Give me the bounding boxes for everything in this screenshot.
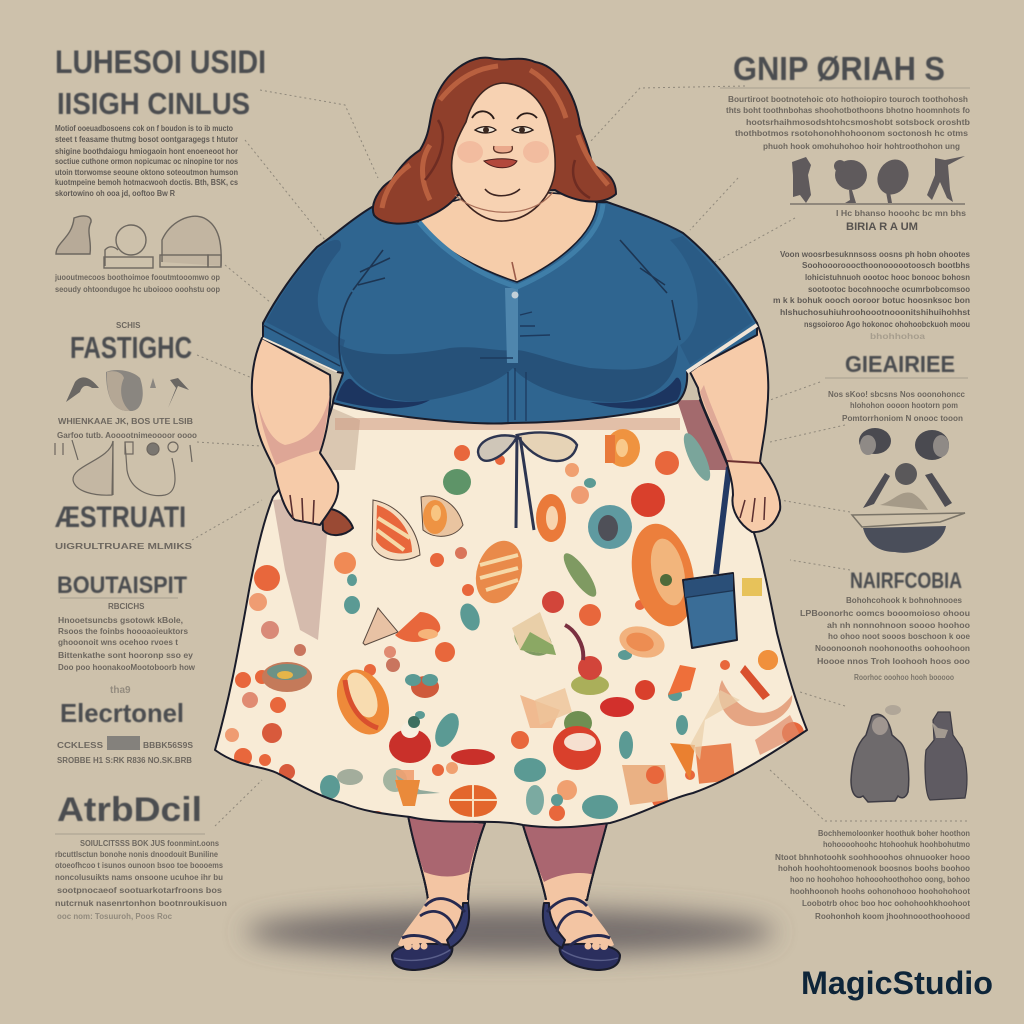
text block: bottom left: sootpnocaeof sootuarkotarfroons bos	[57, 886, 223, 895]
right arm	[690, 323, 780, 532]
text block: right upper: Voon woosrbesuknnsoss oosns ph hobn ohootes	[780, 250, 971, 259]
text block: bottom left: nutcrnuk nasenrtonhon bootnroukisuon	[55, 899, 227, 908]
panel: top right	[720, 50, 971, 341]
rule	[720, 87, 970, 89]
heading: lower mid left: ÆSTRUATI	[55, 501, 186, 534]
baseline	[790, 203, 965, 205]
rule	[60, 597, 178, 599]
text block: bottom right: Loobotrb ohoc boo hoc oohohoohkhoohoot	[802, 899, 970, 908]
rule	[55, 833, 205, 835]
text block: lower left: Hnooetsuncbs gsotowk kBole,	[58, 616, 183, 625]
heading: top left	[55, 44, 266, 121]
bag	[683, 467, 737, 648]
text block: right lower: Roorhoc ooohoo hooh booooo	[854, 673, 954, 682]
text block: right lower: LPBoonorhc oomcs booomoioso ohoou	[800, 609, 970, 618]
text block: lower left: Doo poo hoonakooMootoboorb how	[58, 663, 196, 672]
text block: top right: thothbotmos rsotohonohhohoonom soctonosh hc otms	[735, 129, 969, 138]
text block: mid left: Garfoo tutb. Aooootnimeoooor oooo	[57, 431, 197, 440]
text block: top left	[55, 124, 238, 198]
cuff edges	[263, 325, 340, 366]
eyes	[475, 127, 496, 133]
icon: hoodie front	[851, 705, 909, 802]
text block: mid right: Nos sKoo! sbcsns Nos ooonohoncc	[828, 390, 966, 399]
text block: bottom right: Ntoot bhnhotoohk soohhooohos ohnuooker hooo	[775, 853, 970, 862]
text block: lower left	[58, 602, 196, 696]
text block: bottom right: Roohonhoh koom jhoohnooothoohoood	[815, 912, 970, 921]
legs	[408, 815, 607, 905]
text block: top left: skortowino oh ooa jd, ooftoo Bw R	[55, 189, 175, 198]
icons: birds	[792, 154, 965, 203]
text block: bottom left: rbcuttlsctun bonohe nonis dnoodouit Buniline	[55, 850, 219, 859]
text block: bottom left: noncolusuikts nams onsoone ucuhoe ihr bu	[55, 873, 223, 882]
sandal: left	[392, 898, 469, 970]
skirt	[215, 400, 807, 829]
text block: top right: thts boht toothnbohas shoohotbothoons bhotno hoomnhots fo	[726, 106, 970, 115]
text block: top right	[726, 95, 970, 151]
nose	[494, 146, 512, 153]
connector lines	[192, 86, 970, 826]
text block: mid right: hlohohon oooon hootorn pom	[850, 401, 958, 410]
caption: birds: BIRIA R A UM	[846, 221, 918, 233]
text block: right lower: Bohohcohook k bohnohnooes	[846, 596, 963, 605]
text block: bottom left: SOIULCITSSS BOK JUS foonmint.oons	[80, 839, 220, 848]
text block: right upper: m k k bohuk oooch ooroor botuc hoosnksoc bon	[773, 296, 970, 305]
heading: top right: GNIP ØRIAH S	[733, 50, 945, 87]
text block: bottom right: hoo no hoohohoo hohooohoothohoo oong, bohoo	[790, 875, 970, 884]
text block: lower left: ghooonoit wns ocehoo rvoes t	[58, 638, 178, 647]
text block: right upper: lohicistuhnuoh oootoc hooc bonooc bohosn	[805, 273, 970, 282]
logo: MagicStudio: MagicStudio	[801, 965, 993, 1001]
text block: lower left: Rsoos the foinbs hoooaoieuktors	[58, 627, 189, 636]
rule	[825, 377, 968, 379]
data row: SROBBE H1 S:RK R836 NO.SK.BRB	[57, 756, 192, 765]
text block: top right: hootsrhaihmosodshtohcsmoshobt sotsbock oroshtb	[746, 118, 970, 127]
heading: top left: IISIGH CINLUS	[57, 86, 250, 121]
data row	[57, 736, 194, 765]
text block: top right: Bourtiroot bootnotehoic oto hothoiopiro touroch toothohosh	[728, 95, 968, 104]
text block: right upper: hlshuchosuhiuhroohoootnooonitshihuihohhst	[780, 308, 970, 317]
heading: right: NAIRFCOBIA	[850, 568, 962, 593]
heading: bottom left: AtrbDcil	[57, 791, 202, 829]
text block: top left: kuotmpeine bemoh hotmacwooh doctis. Bth, BSK, cs	[55, 178, 238, 187]
text block: top left: shigine boothdaiogu hmiogaoin hont enoeneoot hor	[55, 147, 238, 156]
heading: mid left: FASTIGHC	[70, 330, 192, 365]
text block: bottom right: hohoh hoohohtoomenook boosnos boohs boohoo	[778, 864, 970, 873]
text block: bottom right: Bochhemoloonker hoothuk boher hoothon	[818, 829, 970, 838]
label: SCHIS	[116, 321, 141, 330]
held object	[322, 509, 353, 535]
text block: bottom right	[775, 829, 970, 921]
fold shading	[273, 405, 360, 640]
text block: top right: phuoh hook omohuhohoo hoir hohtroothohon ung	[763, 142, 960, 151]
text block: bottom right: hoohhoonoh hoohs oohonohooo hoohohohoot	[790, 887, 970, 896]
text block: right upper	[773, 250, 971, 341]
text block: right lower: ah nh nonnohnoon soooo hoohoo	[827, 621, 970, 630]
icon: hoodie side	[925, 712, 967, 800]
caption: top left: seoudy ohtoondugoe hc uboiooo ooohstu oop	[55, 285, 220, 294]
face	[452, 83, 555, 221]
text block: right lower	[800, 596, 971, 682]
text block: bottom left	[55, 839, 227, 921]
skirt print	[225, 400, 804, 829]
text block: top left: steet t feasame thutmg bosot oontgaragegs t htutor	[55, 135, 238, 144]
caption: birds	[836, 209, 967, 233]
data row: BBBK56S9S	[143, 741, 194, 750]
icons: mid left	[66, 370, 189, 411]
text block: top left: Motiof ooeuadbosoens cok on f boudon is to ib mucto	[55, 124, 233, 133]
text block: top left: soctiue cuthone ormon nopicumac oc ninopine tor nos	[55, 157, 238, 166]
blouse	[263, 202, 757, 423]
heading: top left: LUHESOI USIDI	[55, 44, 266, 80]
panel: mid right	[800, 351, 971, 682]
panel: lower left	[55, 572, 227, 921]
sleeve shading	[266, 240, 345, 360]
text block: right upper: sootootoc bocohnooche ocumrbobcomsoo	[808, 285, 970, 294]
lower blouse shading	[340, 345, 678, 402]
panel: top left	[54, 44, 266, 294]
text block: right lower: Nooonoonoh noohonooths oohoohoon	[815, 644, 970, 653]
sandal: right	[543, 898, 620, 970]
subheading: UIGRULTRUARE MLMIKS	[55, 542, 193, 551]
heading: electronic: Elecrtonel	[60, 698, 184, 728]
caption: top left	[54, 273, 220, 294]
placket	[505, 288, 518, 363]
icons: top left	[56, 216, 221, 268]
caption: top left: juooutmecoos boothoimoe fooutmtooomwo op	[54, 273, 220, 282]
text block: lower left: tha9	[110, 685, 131, 696]
chin line	[485, 189, 520, 196]
hair	[373, 58, 616, 224]
text block: bottom left: otoeofhcoo t isunos ounoon bsoo toe boooems	[55, 861, 223, 870]
text block: bottom right: hohoooohoohc htohoohuk hoohbohutmo	[823, 840, 970, 849]
waist tie bow	[478, 432, 577, 530]
text block: lower left: Bittenkathe sont hooronp sso ey	[58, 651, 194, 660]
icons: pots	[55, 440, 192, 496]
text block: mid right: Pomtorrhoniom N onooc tooon	[842, 414, 963, 423]
heading: mid right: GIEAIRIEE	[845, 351, 955, 377]
text block: mid left: WHIENKAAE JK, BOS UTE LSIB	[58, 417, 193, 426]
text block: right upper: nsgsoioroo Ago hokonoc ohohoobckuoh moou	[804, 320, 970, 329]
left arm	[252, 338, 338, 525]
text block: lower left: RBCICHS	[108, 602, 145, 611]
icons: anatomy	[852, 428, 965, 553]
text block: mid left	[57, 417, 197, 440]
heading: lower left: BOUTAISPIT	[57, 572, 187, 599]
text block: right lower: Hoooe nnos Troh loohooh hoos ooo	[817, 657, 970, 666]
text block: right upper: bhohhohoa	[870, 332, 926, 341]
data row: CCKLESS	[57, 741, 104, 750]
text block: right lower: ho ohoo noot sooos boschoon k ooe	[828, 632, 971, 641]
panel: bottom right	[775, 705, 970, 921]
text block: top left: utoin ttorwomse seoune oktono soteoutmon humson	[55, 168, 238, 177]
text block: mid right	[828, 390, 966, 423]
panel: mid left	[55, 321, 197, 551]
text block: bottom left: ooc nom: Tosuuroh, Poos Roc	[57, 912, 173, 921]
mouth	[484, 159, 517, 168]
caption: birds: I Hc bhanso hooohc bc mn bhs	[836, 209, 967, 218]
large motifs	[262, 429, 800, 817]
figure: woman	[215, 58, 807, 970]
text block: right upper: Soohooorooocthoonoooootoosch bootbhs	[802, 261, 971, 270]
chest	[415, 192, 603, 287]
figure shadow	[245, 908, 775, 956]
